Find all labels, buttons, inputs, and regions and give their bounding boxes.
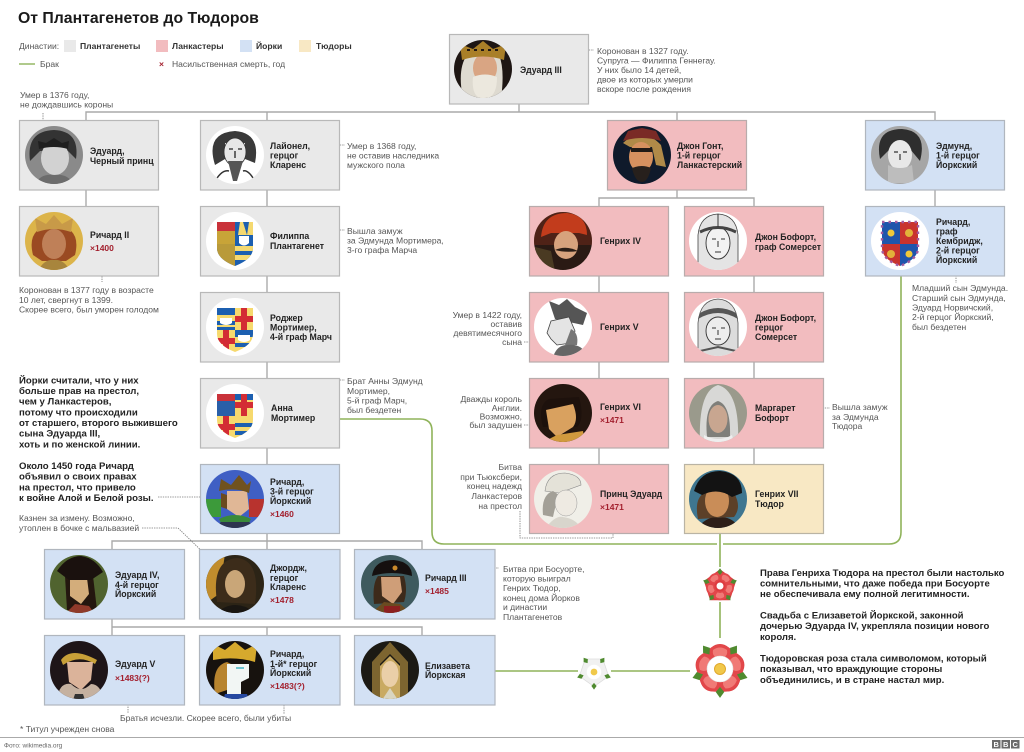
legend: Плантагенеты [80,41,140,51]
note: Ричард, граф Кембридж: Эдуард Норвичский, [912,302,993,312]
card: Джон Бофорт, герцог Сомерсет: Сомерсет [755,332,798,342]
card: Эдмунд, 1-й герцог Йоркский [866,120,1004,190]
portrait: Ричард, 1-й* герцог [205,640,265,700]
logo: BBC: C [1012,740,1018,749]
text block: права Йорков: к войне Алой и Белой розы. [19,493,154,504]
card: Эдуард III: Эдуард III [520,65,562,75]
text block: Генрих Тюдор и роза: Тюдоровская роза стала символомом, который [760,654,987,664]
text block: Генрих Тюдор и роза: короля. [760,632,796,643]
card: Анна Мортимер [200,378,340,448]
card: Джордж, герцог Кларенс: Кларенс [270,582,306,592]
card: Джон Гонт: Ланкастерский [677,160,742,170]
note: Ричард II: Скорее всего, был уморен голодом [19,304,159,314]
portrait: Генрих VI [533,383,593,443]
card: Генрих VI: Генрих VI [600,402,641,412]
card: Джон Гонт [608,120,746,190]
card: Принц Эдуард: ×1471 [600,502,624,512]
note: Генрих V: сына [502,337,522,347]
family tree connectors [86,104,935,635]
card: Джон Гонт: Джон Гонт, [677,141,724,151]
text block: права Йорков: чем у Ланкастеров, [19,397,112,408]
text block: права Йорков: хоть и по женской линии. [19,439,140,450]
card: Ричард, граф Кембридж: Ричард, [936,217,970,227]
card: Ричард, граф Кембридж: 2-й герцог [936,246,980,256]
note: Ричард III: которую выиграл [503,574,571,584]
card: Роджер Мортимер [200,292,340,362]
text block: права Йорков: Около 1450 года Ричард [19,461,134,472]
card: Эдуард, Черный принц [20,120,158,190]
note: Ричард, граф Кембридж: 2-й герцог Йоркский, [912,311,994,322]
card: Эдмунд, 1-й герцог Йоркский: Эдмунд, [936,141,972,151]
note: Георг казнён: Казнен за измену. Возможно, [19,513,135,523]
card: Генрих VI: ×1471 [600,415,624,425]
text block: Генрих Тюдор и роза: дочерью Эдуарда IV, укрепляла позиции нового [760,621,989,632]
legend: Йорки [256,40,282,51]
card: Роджер Мортимер: Роджер [270,313,303,323]
card: Лайонел, герцог Кларенс: Кларенс [270,160,306,170]
note: Ричард III: Генрих Тюдор, [503,583,561,593]
card: Эдуард, Черный принц: Эдуард, [90,146,125,156]
note: братья: Братья исчезли. Скорее всего, были убиты [120,713,291,723]
note: Анна Мортимер: Брат Анны Эдмунд [347,376,423,386]
card: Ричард II: Ричард II [90,230,129,240]
note: Генрих V: оставив [491,319,522,329]
card: Ричард III [354,550,495,619]
note: Черный принц: Умер в 1376 году, [20,90,89,100]
card: Ричард, граф Кембридж: Кембридж, [936,236,983,246]
card: Елизавета Йоркская [354,636,495,705]
note: Лайонел: мужского пола [347,160,405,170]
note: Эдуард III: Коронован в 1327 году. [597,46,689,56]
portrait: Принц Эдуард [533,469,593,529]
logo: BBC: B [993,740,999,749]
text block: права Йорков: на престол, что привело [19,482,136,493]
note: Принц Эдуард: конец надежд [467,481,522,491]
note: Генрих V: девятимесячного [453,328,522,338]
icon: белая роза Йорков [576,656,612,690]
note: Анна Мортимер: был бездетен [347,405,402,415]
note: Генрих VI: Англии. [492,403,522,413]
icon: герб Филиппы [206,212,264,270]
card: Принц Эдуард [530,464,668,534]
card: Джордж, герцог Кларенс: герцог [270,573,299,583]
text block: права Йорков: от старшего, второго выжившего [19,418,178,429]
portrait: Елизавета Йоркская [360,640,420,700]
marriage lines [318,276,901,671]
card: Генрих V: Генрих V [600,322,639,332]
note: Ричард III: конец дома Йорков [503,592,580,603]
note: Принц Эдуард: на престол [478,501,522,511]
icon: герб Анны Мортимер [206,384,264,442]
card: Джордж, герцог Кларенс: ×1478 [270,595,294,605]
card: Эдмунд, 1-й герцог Йоркский: 1-й герцог [936,150,980,160]
card: Эдуард V [44,636,184,705]
card: Эдуард IV: Йоркский [115,588,156,599]
card: Эдуард IV [44,550,184,619]
card: Маргарет Бофорт: Маргарет [755,403,796,413]
card: Ричард, 3-й герцог Йоркский [200,464,340,534]
portrait: Ричард II [24,211,84,271]
text block: Генрих Тюдор и роза: Свадьба с Елизаветой Йоркской, законной [760,610,964,622]
portrait: Ричард, 3-й герцог [205,469,265,529]
note: Анна Мортимер: 5-й граф Марч, [347,396,407,406]
card: Ричард III: ×1485 [425,586,449,596]
card: Эдуард, Черный принц: Черный принц [90,156,154,166]
card: Генрих VII Тюдор: Тюдор [755,499,784,509]
portrait: Генрих IV [533,211,593,271]
card: Ричард, 1-й герцог Йоркский: ×1483(?) [270,681,305,691]
card: Маргарет Бофорт: Бофорт [755,413,790,423]
portrait: Джон Гонт [612,125,672,185]
card: Джон Бофорт, герцог Сомерсет: Джон Бофорт, [755,313,816,323]
card: Генрих VII Тюдор [684,464,824,534]
note: Эдуард III: Супруга — Филиппа Геннегау. [597,56,716,66]
card: Елизавета Йоркская: Елизавета [425,661,470,671]
card: Эдмунд, 1-й герцог Йоркский: Йоркский [936,159,977,170]
card: Ричард, граф Кембридж: граф [936,226,958,236]
card: Маргарет Бофорт [684,378,824,448]
portrait: Джордж [205,554,265,614]
text block: Генрих Тюдор и роза: показывал, что враждующие стороны [760,664,942,675]
portrait: Ричард III [360,554,420,614]
card: Анна Мортимер: Мортимер [271,413,315,423]
card: Роджер Мортимер: Мортимер, [270,322,317,332]
portrait: Эдмунд [870,125,930,185]
card: Джон Бофорт, герцог Сомерсет [684,292,824,362]
card: Эдуард V: ×1483(?) [115,673,150,683]
portrait: Генрих V [533,297,593,357]
logo: BBC: B [1003,740,1009,749]
text block: Генрих Тюдор и роза: Права Генриха Тюдора на престол были настолько [760,568,1005,579]
note: Лайонел: Умер в 1368 году, [347,141,416,151]
icon: герб Роджера Мортимера [206,298,264,356]
note: Филиппа: Вышла замуж [347,226,403,236]
card: Анна Мортимер: Анна [271,403,293,413]
card: Ричард, 1-й герцог Йоркский [200,636,340,705]
card: Елизавета Йоркская: Йоркская [425,669,465,680]
card: Генрих V [530,292,668,362]
card: Эдуард IV: 4-й герцог [115,580,159,590]
card: Филиппа Плантагенет: Плантагенет [270,241,325,251]
card: Генрих IV [530,206,668,276]
icon: тюдоровская роза [691,643,749,698]
title: От Плантагенетов до Тюдоров [18,10,259,27]
portrait: Черный принц [24,125,84,185]
note: Генрих V: Умер в 1422 году, [453,310,522,320]
footnote: * Титул учрежден снова [20,724,115,734]
note: Ричард III: Плантагенетов [503,612,563,622]
text block: права Йорков: потому что происходили [19,407,138,418]
note: Принц Эдуард: при Тьюксбери, [460,472,522,482]
note: Ричард III: Битва при Босуорте, [503,564,584,574]
card: Эдуард III [450,34,588,104]
note: Генрих VI: Возможно, [480,412,522,422]
text block: права Йорков: объявил о своих правах [19,472,137,483]
card: Ричард, 3-й герцог Йоркский: Ричард, [270,477,304,487]
card: Ричард, 1-й герцог Йоркский: 1-й* герцог [270,659,318,669]
portrait: Эдуард V [49,640,109,700]
card: Ричард III: Ричард III [425,573,467,583]
card: Генрих VII Тюдор: Генрих VII [755,489,798,499]
portrait: Эдуард IV [49,554,109,614]
portrait: Джон Бофорт, граф [688,211,748,271]
portrait: Джон Бофорт, герцог [688,297,748,357]
note: Ричард II: Коронован в 1377 году в возрасте [19,285,154,295]
card: Лайонел, герцог Кларенс: герцог [270,150,299,160]
note: Маргарет Бофорт: Вышла замуж [832,402,888,412]
note: Эдуард III: вскоре после рождения [597,84,691,94]
note: Ричард II: 10 лет, свергнут в 1399. [19,295,113,305]
note: Принц Эдуард: Битва [498,462,522,472]
card: Филиппа Плантагенет: Филиппа [270,231,309,241]
portrait: Эдуард III [453,39,513,99]
note: Анна Мортимер: Мортимер, [347,386,390,396]
text block: Генрих Тюдор и роза: объединились, и в стране настал мир. [760,675,944,686]
card: Лайонел, герцог Кларенс [200,120,340,190]
card: Ричард, 1-й герцог Йоркский: Йоркский [270,667,311,678]
icon: герб Ричарда Кембриджа [871,212,929,270]
legend: Тюдоры [316,41,352,51]
card: Ричард, 1-й герцог Йоркский: Ричард, [270,649,304,659]
note: Георг казнён: утоплен в бочке с мальвазией [19,523,139,533]
text block: права Йорков: Йорки считали, что у них [19,374,139,386]
note: Филиппа: 3-го графа Марча [347,245,417,255]
text block: права Йорков: больше прав на престол, [19,386,139,397]
text block: права Йорков: сына Эдуарда III, [19,429,100,440]
annotation leader lines [43,50,956,714]
card: Ричард, граф Кембридж: Йоркский [936,254,977,265]
note: Лайонел: не оставив наследника [347,150,439,160]
card: Джон Бофорт, граф Сомерсет [684,206,824,276]
card: Джон Бофорт, герцог Сомерсет: герцог [755,322,784,332]
photo credit: Фото: wikimedia.org [4,742,63,750]
card: Генрих VI [530,378,668,448]
card: Ричард II: ×1400 [90,243,114,253]
card: Ричард, граф Кембридж [866,206,1004,276]
text block: Генрих Тюдор и роза: сомнительными, что даже победа при Босуорте [760,578,990,590]
card: Принц Эдуард: Принц Эдуард [600,489,663,499]
card: Филиппа Плантагенет [200,206,340,276]
logo: BBC [992,740,1020,749]
card: Эдуард IV: Эдуард IV, [115,570,159,580]
card: Джордж, герцог Кларенс [200,550,340,619]
legend: Насильственная смерть, год [172,59,285,69]
card: Эдуард V: Эдуард V [115,659,156,669]
card: Ричард II [20,206,158,276]
card: Ричард, 3-й герцог Йоркский: Йоркский [270,495,311,506]
card: Генрих IV: Генрих IV [600,236,641,246]
legend: × [159,59,164,69]
note: Генрих VI: был задушен [469,420,522,430]
card: Ричард, 3-й герцог Йоркский: ×1460 [270,509,294,519]
note: Ричард, граф Кембридж: был бездетен [912,322,967,332]
note: Маргарет Бофорт: Тюдора [832,421,863,431]
note: Эдуард III: двое из которых умерли [597,74,693,84]
footer rule [0,736,1024,738]
card: Лайонел, герцог Кларенс: Лайонел, [270,141,310,151]
card: Джон Бофорт, граф Сомерсет: Джон Бофорт, [755,232,816,242]
note: Принц Эдуард: Ланкастеров [471,491,522,501]
note: Ричард, граф Кембридж: Младший сын Эдмунда. [912,283,1008,293]
note: Черный принц: не дождавшись короны [20,100,113,110]
card: Роджер Мортимер: 4-й граф Марч [270,332,332,342]
card: Ричард, 3-й герцог Йоркский: 3-й герцог [270,486,314,496]
note: Маргарет Бофорт: за Эдмунда [832,412,879,422]
legend: Брак [40,59,59,69]
text block: Генрих Тюдор и роза: не обеспечивала ему полной легитимности. [760,589,970,600]
card: Джон Бофорт, граф Сомерсет: граф Сомерсет [755,242,822,252]
portrait: Маргарет Бофорт [688,383,748,443]
legend: Династии: [19,41,59,51]
card: Джордж, герцог Кларенс: Джордж, [270,563,307,573]
icon: красная роза Ланкастеров [702,568,738,602]
legend [19,40,352,69]
portrait: Лайонел [205,125,265,185]
note: Эдуард III: У них было 14 детей, [597,65,681,75]
note: Ричард, граф Кембридж: Старший сын Эдмунда, [912,293,1006,303]
note: Филиппа: за Эдмунда Мортимера, [347,236,444,246]
note: Генрих VI: Дважды король [460,394,523,404]
legend: Ланкастеры [172,41,224,51]
portrait: Генрих VII [688,469,748,529]
note: Ричард III: и династии [503,602,547,612]
card: Джон Гонт: 1-й герцог [677,150,721,160]
